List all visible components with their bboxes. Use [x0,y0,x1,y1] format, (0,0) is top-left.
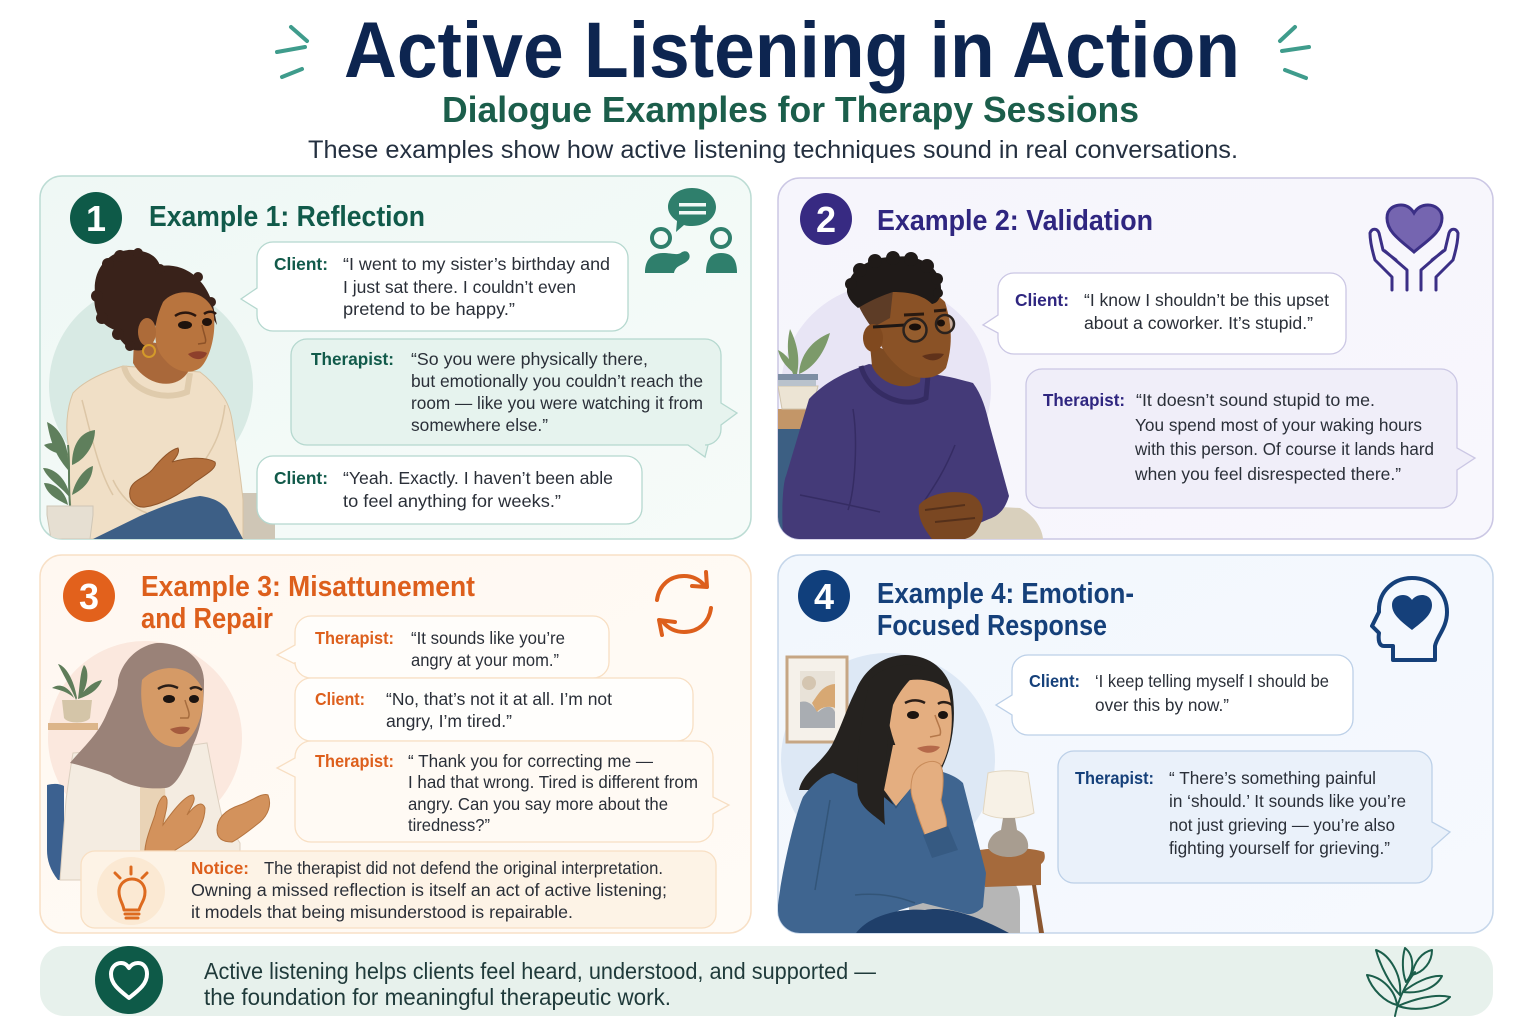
heading [877,578,1134,642]
therapist bubble 1 [277,616,609,678]
icon: heart badge [95,946,163,1014]
therapist bubble: “ There’s something painful [1169,768,1376,788]
therapist bubble 1: angry at your mom.” [411,650,559,670]
therapist bubble 2: I had that wrong. Tired is different from [408,772,698,792]
notice callout: The therapist did not defend the original interpretation. [264,858,663,878]
footer banner [40,946,1493,1016]
therapist bubble: You spend most of your waking hours [1135,415,1422,435]
therapist bubble: not just grieving — you’re also [1169,815,1395,835]
client bubble: about a coworker. It’s stupid.” [1084,313,1313,333]
number badge 3: 3 [79,576,99,617]
title: Active Listening in Action [344,5,1240,94]
panel: example 4 emotion-focused response [778,555,1493,933]
number badge 4: 4 [814,576,834,617]
icon: repair cycle arrows [657,572,711,635]
client bubble: angry, I’m tired.” [386,711,512,731]
closing message: Active listening helps clients feel heard, understood, and supported — [204,958,876,984]
client bubble 2: to feel anything for weeks.” [343,491,561,511]
client bubble [983,273,1346,354]
therapist bubble: when you feel disrespected there.” [1134,464,1401,484]
heading: Example 1: Reflection [149,201,425,233]
icon: hands holding heart [1370,205,1458,290]
illustration: client in hijab [47,641,270,880]
therapist bubble [1026,369,1475,508]
heading: and Repair [141,603,273,635]
heading: Example 4: Emotion- [877,578,1134,610]
therapist bubble 2: angry. Can you say more about the [408,794,668,814]
decorative rays right of title [1280,27,1309,78]
notice callout: it models that being misunderstood is repairable. [191,902,573,922]
client bubble 1: “I went to my sister’s birthday and [343,254,610,274]
therapist bubble: Therapist: [311,349,394,369]
therapist bubble 2: tiredness?” [408,815,490,835]
heading [141,571,475,635]
therapist bubble: fighting yourself for grieving.” [1169,838,1390,858]
client bubble [996,655,1353,735]
number badge 1 [70,192,122,244]
icon: head with heart [1372,578,1447,660]
number badge 4 [798,570,850,622]
illustration: client with curly hair [43,248,275,539]
therapist bubble 2: “ Thank you for correcting me — [408,751,653,771]
notice callout: Notice: [191,858,249,878]
icon: light bulb [97,857,165,925]
notice callout [81,851,716,928]
subtitle: Dialogue Examples for Therapy Sessions [442,89,1139,130]
client bubble 1: pretend to be happy.” [343,299,515,319]
heading: Focused Response [877,610,1107,642]
therapist bubble: Therapist: [1075,768,1154,788]
therapist bubble 2: Therapist: [315,751,394,771]
closing message: the foundation for meaningful therapeutic work. [204,984,671,1010]
client bubble 1: I just sat there. I couldn’t even [343,277,576,297]
icon: conversation [645,188,737,273]
panel: example 3 misattunement and repair [40,555,751,933]
number badge 2 [800,193,852,245]
icon: leaves [1367,948,1450,1016]
client bubble: ‘I keep telling myself I should be [1095,671,1329,691]
number badge 2: 2 [816,199,836,240]
heading: Example 2: Validation [877,205,1153,237]
therapist bubble 2 [277,741,729,842]
panel: example 1 reflection [40,176,751,539]
therapist bubble: in ‘should.’ It sounds like you’re [1169,791,1406,811]
closing message [204,958,876,1010]
client bubble: Client: [1015,290,1069,310]
therapist bubble 1: “It sounds like you’re [411,628,565,648]
number badge 1: 1 [86,198,106,239]
client bubble: over this by now.” [1095,695,1229,715]
therapist bubble: “So you were physically there, [411,349,648,369]
therapist bubble: room — like you were watching it from [411,393,703,413]
therapist bubble [291,339,737,457]
notice callout: Owning a missed reflection is itself an act of active listening; [191,880,667,900]
therapist bubble: Therapist: [1043,390,1125,410]
client bubble [295,678,693,741]
client bubble 1: Client: [274,254,328,274]
therapist bubble 1: Therapist: [315,628,394,648]
therapist bubble [1058,751,1450,883]
illustration: client with long dark hair [778,653,1045,933]
decorative rays left of title [277,27,307,77]
therapist bubble: somewhere else.” [411,415,548,435]
heading: Example 3: Misattunement [141,571,475,603]
number badge 3 [63,570,115,622]
therapist bubble: with this person. Of course it lands hard [1134,439,1434,459]
panel: example 2 validation [778,178,1493,539]
therapist bubble: “It doesn’t sound stupid to me. [1136,390,1375,410]
client bubble: Client: [1029,671,1080,691]
client bubble 1 [241,242,628,331]
client bubble 2: Client: [274,468,328,488]
client bubble: Client: [315,689,365,709]
client bubble: “No, that’s not it at all. I’m not [386,689,612,709]
illustration: client with glasses [778,251,1043,539]
client bubble 2 [257,456,642,524]
client bubble: “I know I shouldn’t be this upset [1084,290,1329,310]
intro line: These examples show how active listening techniques sound in real conversations. [308,136,1238,164]
therapist bubble: but emotionally you couldn’t reach the [411,371,703,391]
client bubble 2: “Yeah. Exactly. I haven’t been able [343,468,613,488]
